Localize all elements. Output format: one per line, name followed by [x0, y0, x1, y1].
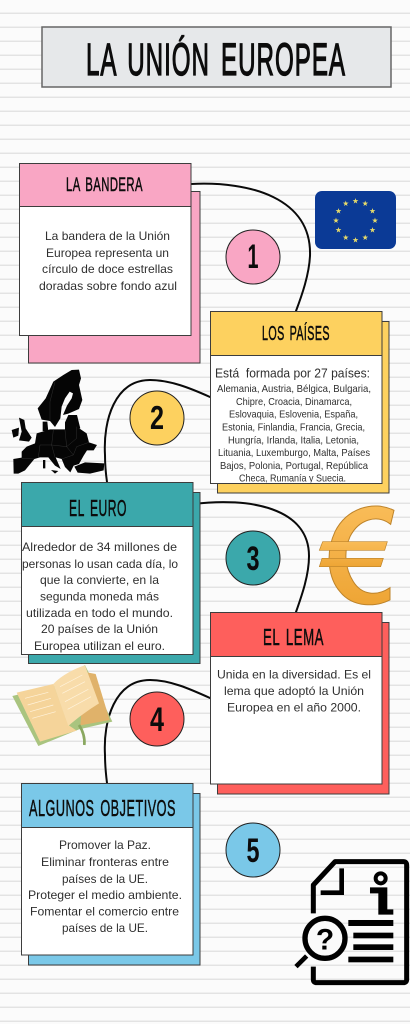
connector 2	[105, 380, 210, 482]
icon: EU flag: ★	[362, 233, 369, 242]
text: los países: Lituania, Luxemburgo, Malta, Países	[218, 448, 370, 459]
icon: document with info and question	[296, 862, 407, 983]
text: la bandera: Europea representa un	[46, 246, 169, 260]
number 2	[130, 391, 184, 445]
text: el euro: 20 países de la Unión	[41, 622, 158, 636]
icon: EU flag: ★	[352, 196, 359, 206]
icon: EU flag: ★	[372, 216, 379, 225]
icon: EU flag: ★	[335, 226, 342, 235]
text: la bandera: La bandera de la Unión	[45, 229, 170, 243]
heading: algunos objetivos	[22, 784, 193, 828]
text: los países: Está formada por 27 países:	[215, 366, 370, 380]
text: algunos objetivos: países de la UE.	[62, 921, 148, 935]
text: algunos objetivos: Promover la Paz.	[59, 838, 151, 852]
text: la bandera: doradas sobre fondo azul	[39, 279, 177, 293]
connector 3	[193, 502, 309, 612]
number 4: 4	[150, 701, 164, 739]
text: el euro: personas lo usan cada día, lo	[22, 557, 178, 571]
text: algunos objetivos	[28, 838, 182, 935]
number 1: 1	[248, 238, 258, 276]
number 3: 3	[246, 540, 260, 578]
number 4	[130, 692, 184, 746]
text: los países: Chipre, Croacia, Dinamarca,	[236, 397, 352, 408]
text: la bandera	[39, 229, 177, 293]
text: el euro: utilizada en todo el mundo.	[26, 606, 173, 620]
text: el euro: Alrededor de 34 millones de	[22, 540, 177, 554]
heading: el lema	[210, 612, 382, 656]
icon: EU flag	[315, 191, 396, 249]
heading: la bandera	[20, 164, 191, 206]
text: los países: Bajos, Polonia, Portugal, República	[220, 461, 368, 472]
panel: la bandera	[20, 164, 200, 363]
icon: EU flag: ★	[369, 206, 376, 215]
number 2: 2	[150, 399, 164, 436]
icon: EU flag: ★	[342, 199, 349, 208]
icon: euro symbol	[319, 506, 394, 605]
number 5: 5	[246, 832, 260, 870]
text: el lema: Unida en la diversidad. Es el	[217, 668, 371, 682]
heading: algunos objetivos: ALGUNOS OBJETIVOS	[29, 795, 176, 821]
number 1	[226, 230, 280, 284]
panel: el euro	[22, 482, 200, 664]
panel: el lema	[210, 612, 389, 794]
text: los países: Hungría, Irlanda, Italia, Letonia,	[228, 436, 359, 446]
heading: los países: LOS PAÍSES	[262, 322, 330, 345]
heading: el euro	[22, 482, 193, 526]
text: los países: Eslovaquia, Eslovenia, España,	[229, 410, 358, 420]
number 5	[226, 823, 280, 877]
heading: la bandera: LA BANDERA	[66, 174, 143, 196]
icon: EU flag: ★	[342, 233, 349, 242]
icon: open book	[12, 665, 112, 746]
text: algunos objetivos: países de la UE.	[62, 872, 148, 886]
text: el lema	[217, 668, 371, 714]
text: los países: Estonia, Finlandia, Francia, Grecia,	[222, 422, 365, 434]
icon: EU flag: ★	[352, 236, 359, 244]
text: el lema: Europea en el año 2000.	[227, 700, 361, 714]
icon: EU flag: ★	[333, 216, 340, 225]
connector 1	[191, 184, 310, 311]
number 3	[226, 531, 280, 585]
heading: el lema: EL LEMA	[263, 624, 324, 650]
text: el lema: lema que adoptó la Unión	[224, 684, 364, 698]
text: algunos objetivos: Fomentar el comercio entre	[30, 904, 179, 918]
panel: algunos objetivos	[22, 784, 200, 965]
text: el euro: Europea utilizan el euro.	[34, 639, 165, 653]
text: algunos objetivos: Proteger el medio ambiente.	[28, 888, 182, 902]
icon: EU flag: ★	[362, 199, 369, 208]
icon: EU flag: ★	[335, 206, 342, 215]
icon: map of Europe	[12, 370, 104, 474]
icon: EU flag: ★	[369, 226, 376, 235]
text: el euro: que la convierte, en la	[40, 573, 159, 587]
text: los países: Alemania, Austria, Bélgica, Bulgaria,	[217, 384, 371, 395]
text: el euro: segunda moneda más	[40, 590, 159, 604]
text: algunos objetivos: Eliminar fronteras entre	[41, 855, 169, 869]
panel: los países	[210, 312, 389, 493]
text: la bandera: círculo de doce estrellas	[42, 262, 173, 276]
icon: document with info and question: ?	[316, 923, 334, 956]
text: los países	[215, 366, 371, 484]
text: el euro	[22, 540, 178, 653]
text: los países: Checa, Rumanía y Suecia.	[239, 474, 346, 484]
heading: los países	[210, 312, 382, 356]
heading: el euro: EL EURO	[69, 495, 127, 521]
connector 4	[105, 680, 210, 783]
